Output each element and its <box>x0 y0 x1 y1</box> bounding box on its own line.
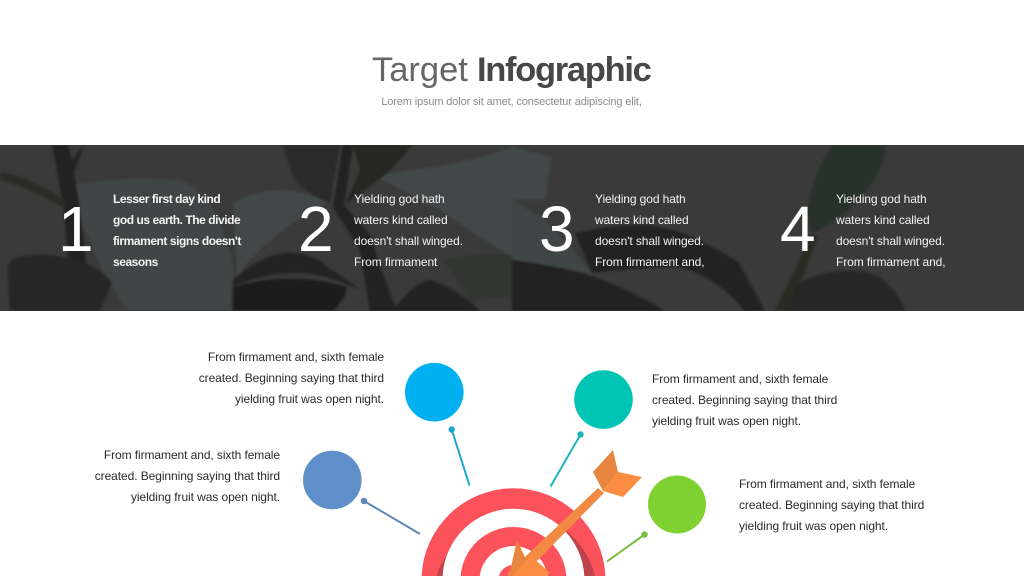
subtitle: Lorem ipsum dolor sit amet, consectetur adipiscing elit, <box>381 96 642 108</box>
item 4 text: From firmament and, <box>836 255 945 269</box>
item 1 text: Lesser first day kind <box>113 192 220 206</box>
callout text: top left: From firmament and, sixth female <box>208 350 384 364</box>
arrow <box>508 450 642 576</box>
item 2 number: 2 <box>298 193 334 265</box>
item 1 text: seasons <box>113 255 158 269</box>
item 2 text: waters kind called <box>354 213 448 227</box>
item 3 text: From firmament and, <box>595 255 704 269</box>
connector: teal <box>550 431 584 486</box>
callout text: lower right: From firmament and, sixth female <box>739 477 915 491</box>
callout text: lower left: yielding fruit was open night. <box>131 490 280 504</box>
callout text: lower left: created. Beginning saying that third <box>95 469 280 483</box>
item 1 text <box>113 192 242 269</box>
callout text: lower right <box>739 477 924 533</box>
callout text: top right: yielding fruit was open night. <box>652 414 801 428</box>
target <box>422 488 605 576</box>
item 2 text: doesn't shall winged. <box>354 234 463 248</box>
item 4 text: waters kind called <box>836 213 930 227</box>
icon: green circle <box>648 476 706 534</box>
item 4 number: 4 <box>780 193 816 265</box>
connector: sky blue <box>448 426 470 486</box>
item 3 text: doesn't shall winged. <box>595 234 704 248</box>
icon: teal circle <box>574 370 633 429</box>
item 3 text: Yielding god hath <box>595 192 686 206</box>
item 2 text: From firmament <box>354 255 437 269</box>
connector: blue <box>361 498 420 534</box>
callout text: top left: yielding fruit was open night. <box>235 392 384 406</box>
item 1 text: firmament signs doesn't <box>113 234 241 248</box>
callout text: lower left <box>95 448 280 504</box>
item 2 text: Yielding god hath <box>354 192 445 206</box>
item 4 text: doesn't shall winged. <box>836 234 945 248</box>
icon: sky blue circle <box>405 363 464 422</box>
item 1 text: god us earth. The divide <box>113 213 240 227</box>
item 1 number: 1 <box>58 193 94 265</box>
callout text: top right: created. Beginning saying that third <box>652 393 837 407</box>
icon: blue circle <box>303 451 362 509</box>
item 3 text: waters kind called <box>595 213 689 227</box>
item 2 text <box>354 192 463 269</box>
callout text: top right <box>652 372 837 428</box>
title <box>372 51 651 89</box>
callout text: lower left: From firmament and, sixth female <box>104 448 280 462</box>
title: Infographic <box>477 51 651 89</box>
item 4 text <box>836 192 945 269</box>
callout text: lower right: yielding fruit was open night. <box>739 519 888 533</box>
callout text: top left: created. Beginning saying that third <box>199 371 384 385</box>
connector: green <box>607 531 648 562</box>
title: Target <box>372 51 468 89</box>
callout text: lower right: created. Beginning saying that third <box>739 498 924 512</box>
callout text: top left <box>199 350 384 406</box>
item 4 text: Yielding god hath <box>836 192 927 206</box>
panel: dark photo band with plant leaves <box>0 145 1024 311</box>
item 3 text <box>595 192 704 269</box>
item 3 number: 3 <box>539 193 575 265</box>
callout text: top right: From firmament and, sixth female <box>652 372 828 386</box>
